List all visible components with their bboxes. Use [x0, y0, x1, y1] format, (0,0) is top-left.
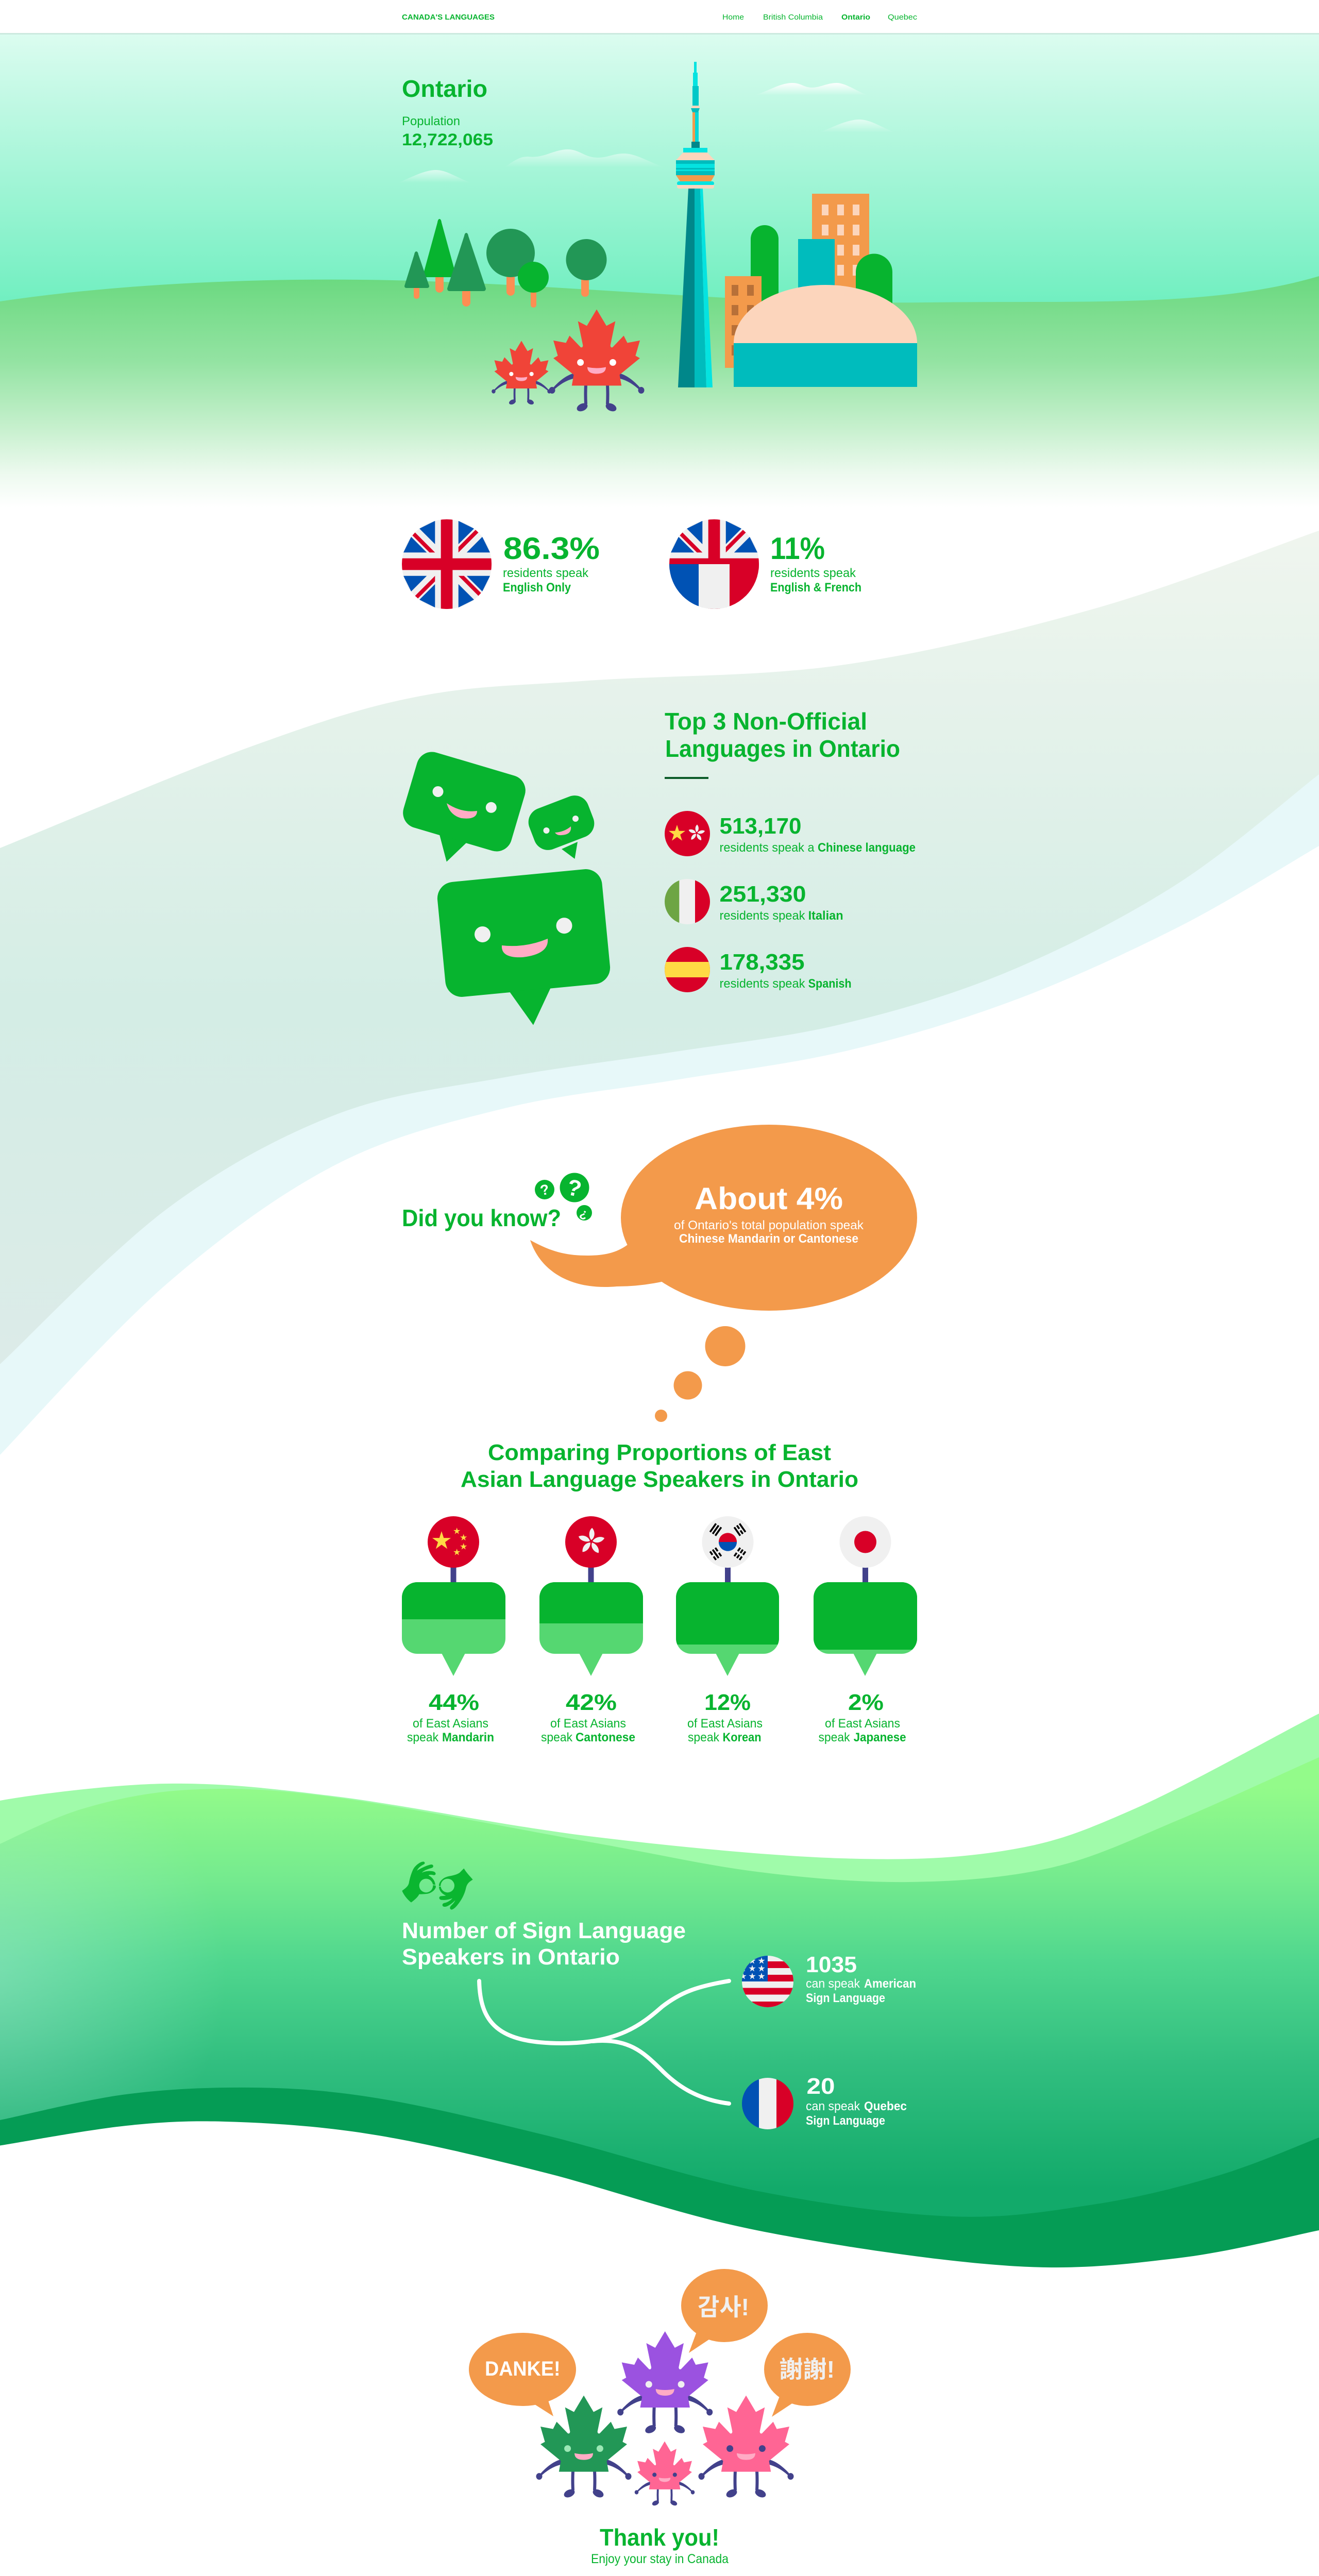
wave background: sign language — [0, 1714, 1319, 2318]
speech bubble: Korean thanks — [681, 2269, 768, 2353]
navigation bar: Ontario — [841, 13, 870, 22]
speech bubble: Chinese thanks: 謝謝! — [779, 2356, 835, 2383]
language row: Spanish — [665, 947, 852, 992]
navigation bar: Quebec — [888, 13, 918, 22]
branching arrow lines — [479, 1981, 729, 2104]
chart column: Korean 12%: Korean — [722, 1731, 762, 1744]
stat: English and French: 11% — [770, 531, 825, 566]
chart column: Cantonese 42%: of East Asians — [550, 1717, 626, 1731]
chart column: Korean 12% — [676, 1516, 779, 1744]
chart column: Mandarin 44%: 44% — [429, 1690, 479, 1715]
stat: American Sign Language: American — [864, 1977, 916, 1991]
icon: China and Hong Kong flag — [665, 811, 710, 856]
icon: Japan flag — [840, 1516, 891, 1584]
hero background — [0, 33, 1319, 510]
icon: French flag — [742, 2078, 793, 2129]
icon: question mark bubbles: ? — [539, 1181, 551, 1198]
language row: Italian — [665, 879, 843, 924]
speech bubble bar — [676, 1582, 779, 1676]
stat: American Sign Language — [739, 1952, 916, 2008]
stat: English and French: residents speak — [770, 566, 856, 580]
maple leaf character: pink — [699, 2396, 793, 2499]
wave background: non-official languages — [0, 531, 1319, 1455]
icon: South Korea flag — [702, 1516, 753, 1584]
chart column: Japanese 2% — [814, 1516, 917, 1744]
icon: Hong Kong flag — [565, 1516, 617, 1584]
clouds — [398, 83, 895, 183]
chart column: Korean 12%: speak — [688, 1731, 720, 1744]
maple leaf characters: red family — [492, 309, 644, 413]
chart column: Cantonese 42%: speak — [541, 1731, 573, 1744]
stat: Quebec Sign Language — [742, 2074, 907, 2129]
language row: Spanish: residents speak — [719, 977, 805, 991]
chart column: Mandarin 44%: Mandarin — [442, 1731, 494, 1744]
hero title: Ontario — [402, 75, 487, 102]
chart column: Japanese 2%: of East Asians — [825, 1717, 900, 1731]
icon: Spanish flag — [665, 947, 710, 992]
chart column: Korean 12%: of East Asians — [687, 1717, 763, 1731]
stat: American Sign Language: can speak — [806, 1977, 860, 1991]
navigation bar — [0, 0, 1319, 35]
stat: Quebec Sign Language: Sign Language — [806, 2114, 885, 2128]
heading: number of sign language speakers: Number of Sign Language — [402, 1918, 686, 1943]
icon: UK and French flag — [669, 519, 759, 611]
speech bubble bar — [539, 1582, 643, 1676]
icon: UK flag — [402, 519, 492, 609]
speech bubble bar — [814, 1582, 917, 1676]
stat: Quebec Sign Language: Quebec — [864, 2099, 907, 2113]
heading: number of sign language speakers: Speakers in Ontario — [402, 1944, 620, 1970]
icon: Italian flag — [665, 879, 710, 924]
callout: about 4 percent speech bubble: Chinese Mandarin or Cantonese — [679, 1232, 858, 1246]
icon: question mark bubbles: ? — [565, 1175, 584, 1202]
chart column: Japanese 2%: speak — [818, 1731, 850, 1744]
icon: question mark bubbles — [535, 1173, 592, 1222]
stat: English and French — [669, 519, 861, 611]
stat: English only: English Only — [503, 581, 571, 595]
stat: English and French: English & French — [770, 581, 861, 595]
chart column: Japanese 2%: 2% — [848, 1690, 884, 1715]
chart column: Korean 12%: 12% — [704, 1690, 751, 1715]
chart column: Cantonese 42%: 42% — [566, 1690, 617, 1715]
speech bubble: DANKE: DANKE! — [485, 2358, 561, 2380]
stat: English only — [402, 519, 600, 609]
heading: did you know: Did you know? — [402, 1205, 561, 1231]
speech bubble bar — [402, 1582, 505, 1676]
callout: about 4 percent speech bubble — [530, 1125, 917, 1311]
hero title: 12,722,065 — [402, 130, 493, 149]
language row: Italian: Italian — [808, 909, 843, 923]
heading: comparing proportions — [461, 1440, 858, 1492]
callout: about 4 percent speech bubble: of Ontario's total population speak — [674, 1218, 864, 1232]
language row: Spanish: 178,335 — [719, 950, 805, 975]
maple leaf character: small pink — [635, 2442, 695, 2506]
navigation bar: British Columbia — [763, 13, 823, 22]
chart column: Cantonese 42% — [539, 1516, 643, 1744]
language row: Chinese: 513,170 — [719, 814, 802, 839]
icon: smiling chat bubbles — [399, 748, 612, 1025]
thought bubbles — [655, 1326, 745, 1422]
thank you message — [591, 2524, 729, 2566]
speech bubble: Chinese thanks — [764, 2333, 851, 2417]
stat: English only: residents speak — [503, 566, 589, 580]
heading: top 3 non-official languages: Languages in Ontario — [665, 735, 900, 762]
chart column: Cantonese 42%: Cantonese — [576, 1731, 635, 1744]
buildings and dome — [725, 194, 917, 387]
stat: Quebec Sign Language: 20 — [807, 2074, 835, 2099]
stat: American Sign Language: 1035 — [806, 1952, 857, 1977]
language row: Chinese: residents speak a — [719, 841, 815, 855]
language row: Chinese: Chinese language — [818, 841, 916, 855]
stat: American Sign Language: Sign Language — [806, 1991, 885, 2005]
maple leaf character: purple — [617, 2331, 713, 2435]
heading: comparing proportions: Comparing Proportions of East — [488, 1440, 831, 1465]
language row: Spanish: Spanish — [808, 977, 852, 991]
speech bubble: DANKE — [469, 2333, 576, 2416]
icon: China flag — [428, 1516, 479, 1584]
icon: US flag — [739, 1956, 793, 2008]
icon: question mark bubbles: ¿ — [578, 1206, 590, 1222]
trees — [404, 219, 607, 308]
speech bubble: Korean thanks: 감사! — [698, 2294, 749, 2320]
language row: Italian: 251,330 — [719, 882, 806, 907]
heading: top 3 non-official languages — [665, 708, 900, 779]
hero title — [402, 75, 493, 149]
heading: comparing proportions: Asian Language Speakers in Ontario — [461, 1467, 858, 1492]
maple leaf character: green — [536, 2396, 632, 2499]
navigation bar: CANADA'S LANGUAGES — [402, 13, 495, 22]
navigation bar: Home — [722, 13, 744, 22]
stat: English only: 86.3% — [503, 531, 600, 566]
language row: Italian: residents speak — [719, 909, 805, 923]
stat: Quebec Sign Language: can speak — [806, 2099, 860, 2113]
thank you message: Enjoy your stay in Canada — [591, 2552, 729, 2566]
chart column: Mandarin 44%: of East Asians — [413, 1717, 488, 1731]
CN tower — [676, 62, 715, 387]
hero title: Population — [402, 114, 460, 128]
chart column: Japanese 2%: Japanese — [854, 1731, 906, 1744]
callout: about 4 percent speech bubble: About 4% — [695, 1181, 843, 1216]
language row: Chinese — [665, 811, 916, 856]
chart column: Mandarin 44% — [402, 1516, 505, 1744]
chart column: Mandarin 44%: speak — [407, 1731, 439, 1744]
thank you message: Thank you! — [600, 2524, 719, 2551]
heading: number of sign language speakers — [402, 1918, 686, 1970]
heading: top 3 non-official languages: Top 3 Non-Official — [665, 708, 867, 735]
icon: sign language hands — [402, 1861, 473, 1910]
